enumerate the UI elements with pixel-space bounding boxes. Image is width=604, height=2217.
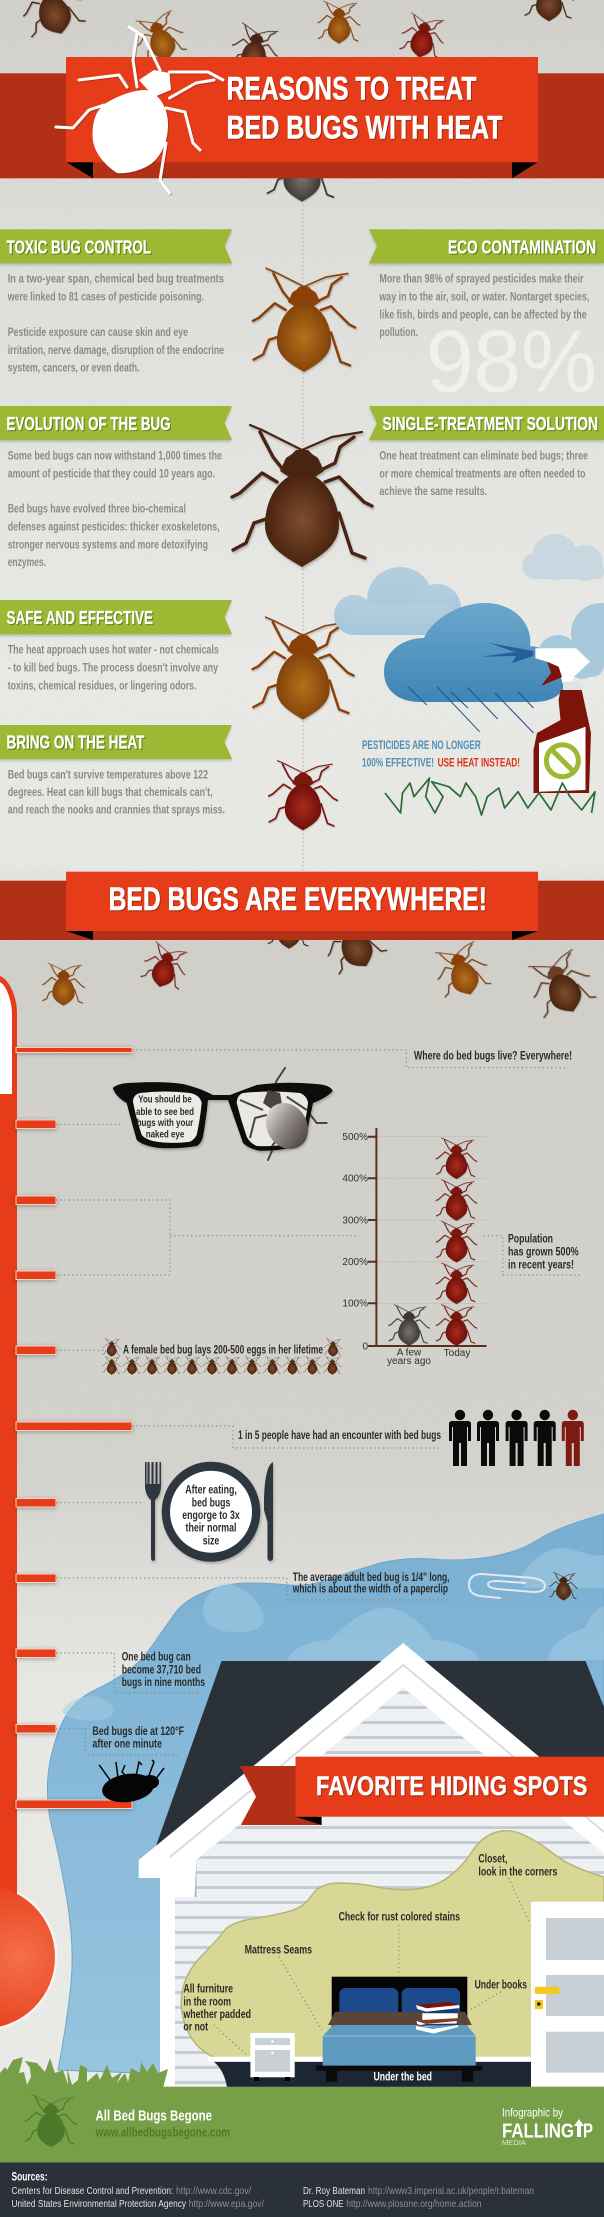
icon: green bug	[25, 2095, 77, 2147]
label: 1 in 5 people have had an encounter with bed bugs	[238, 1430, 441, 1442]
body text: In a two-year span, chemical bed bug treatments	[8, 274, 224, 286]
axis labels: 100%	[342, 1299, 368, 1310]
grid lines	[376, 1137, 486, 1303]
ribbon heading: BRING ON THE HEAT	[6, 731, 145, 752]
label: closet: look in the corners	[478, 1866, 557, 1878]
cloud: pale distant	[522, 534, 604, 581]
panel: single-treatment solution	[369, 406, 604, 498]
label: One bed bug can	[122, 1652, 191, 1664]
cloud: light blue right	[538, 603, 604, 679]
roof	[156, 1661, 604, 1860]
ribbon	[0, 725, 232, 759]
bug legs behind glasses	[268, 1068, 327, 1160]
dotted centre line	[302, 205, 304, 870]
section banner: bed bugs are everywhere	[0, 872, 604, 940]
category labels: Today	[444, 1348, 470, 1359]
body text: enzymes.	[8, 557, 46, 569]
axis labels: 300%	[342, 1215, 368, 1226]
source list: PLOS ONE	[303, 2198, 344, 2210]
leader line	[56, 1502, 144, 1504]
fact: engorge plate	[56, 1462, 273, 1562]
lens text: bugs with your	[137, 1117, 193, 1129]
body text: Some bed bugs can now withstand 1,000 times the	[8, 450, 222, 462]
label: books: Under books	[475, 1979, 527, 1991]
footer: green brand bar	[0, 2057, 604, 2162]
heading: reasons to treat: BED BUGS WITH HEAT	[226, 109, 503, 145]
leader line	[56, 1578, 454, 1600]
ribbon	[369, 406, 604, 440]
category labels: A few	[397, 1348, 422, 1359]
source list: United States Environmental Protection Agency	[12, 2198, 187, 2210]
plate text: After eating,	[185, 1482, 237, 1496]
ribbon	[0, 406, 232, 440]
callout: pesticides no longer effective: PESTICIDES ARE NO LONGER	[362, 740, 481, 752]
plate text: their normal	[186, 1521, 236, 1535]
rain lines	[408, 687, 534, 733]
egg bugs	[103, 1338, 342, 1375]
callout: in recent years!	[508, 1259, 574, 1271]
source list: http://www.epa.gov/	[189, 2198, 264, 2210]
label: furniture: All furniture	[183, 1984, 233, 1996]
tube	[0, 976, 17, 1900]
left lens	[133, 1092, 202, 1143]
source list	[12, 2185, 534, 2210]
lens text	[136, 1094, 194, 1140]
panel: bring on the heat	[0, 725, 232, 817]
label: Bed bugs die at 120°F	[92, 1726, 184, 1738]
body text	[8, 644, 219, 692]
source list: http://www3.imperial.ac.uk/people/r.bateman	[368, 2185, 534, 2197]
axis labels: 0	[362, 1341, 368, 1352]
lens text: You should be	[138, 1094, 192, 1106]
label: The average adult bed bug is 1/4" long,	[293, 1572, 450, 1584]
label: become 37,710 bed	[122, 1664, 201, 1676]
label: furniture: whether padded	[183, 2009, 251, 2021]
door	[531, 1902, 604, 2087]
white gable trim	[139, 1643, 604, 2087]
body text: achieve the same results.	[379, 486, 487, 498]
sky	[47, 1514, 604, 2090]
body text: were linked to 81 cases of pesticide poisoning.	[7, 292, 204, 304]
leader lines	[214, 1878, 530, 2055]
body text	[7, 274, 224, 375]
body text: pollution.	[379, 327, 418, 339]
room blob	[181, 1831, 604, 2058]
label: furniture: or not	[183, 2022, 208, 2034]
fact: 1 in 5 people	[132, 1410, 584, 1466]
credit: falling up media: Infographic by	[502, 2106, 563, 2120]
label: mattress: Mattress Seams	[245, 1944, 312, 1956]
callout: pesticides no longer effective: 100% EFFECTIVE!	[362, 758, 434, 770]
icon: fork	[145, 1462, 161, 1561]
spray jet	[482, 643, 534, 663]
axis labels: 500%	[342, 1132, 368, 1143]
callout: pesticides no longer effective: USE HEAT INSTEAD!	[438, 758, 520, 770]
lens text: naked eye	[146, 1128, 184, 1140]
lens text: able to see bed	[136, 1106, 194, 1118]
icon: magnified bug	[240, 1090, 316, 1157]
category labels	[387, 1348, 470, 1367]
grass outline	[385, 778, 595, 815]
fact: eggs	[56, 1338, 342, 1375]
heading: BED BUGS ARE EVERYWHERE!	[109, 881, 487, 917]
ribbon	[0, 229, 232, 263]
bugs: today column	[436, 1138, 477, 1346]
label	[292, 1572, 450, 1596]
tick marks	[16, 1048, 132, 1808]
source list: Centers for Disease Control and Prevention:	[12, 2185, 173, 2197]
axes	[368, 1128, 486, 1346]
callout	[508, 1234, 579, 1271]
icon: dead bug	[99, 1760, 164, 1805]
icon: orange bed bug	[253, 268, 355, 372]
callout: has grown 500%	[508, 1247, 579, 1259]
plate text: bed bugs	[192, 1496, 231, 1510]
body text	[379, 274, 589, 339]
body text: Bed bugs can't survive temperatures above 122	[8, 769, 208, 781]
leader line	[483, 1236, 582, 1275]
heading: reasons to treat	[226, 70, 503, 145]
spray bottle	[534, 648, 591, 793]
label: under the bed: Under the bed	[374, 2072, 432, 2084]
leader line	[132, 1426, 441, 1448]
label: which is about the width of a paperclip	[292, 1584, 448, 1596]
fact: glasses naked eye	[56, 1068, 333, 1160]
label: furniture: in the room	[183, 1996, 231, 2008]
body text: amount of pesticide that they could 10 years ago.	[8, 468, 215, 480]
fact: size of paperclip	[56, 1572, 578, 1600]
callout: Population	[508, 1234, 553, 1246]
icon: white bug silhouette	[56, 27, 223, 193]
icon: adult bug	[550, 1572, 578, 1600]
ground	[0, 2087, 604, 2162]
panel: eco contamination	[369, 229, 604, 411]
fact: where do bed bugs live	[132, 1050, 572, 1068]
source list: Dr. Roy Bateman	[303, 2185, 365, 2197]
label: closet: Closet,	[478, 1854, 507, 1866]
category labels: years ago	[387, 1356, 431, 1367]
floor	[214, 2062, 531, 2087]
big 98% watermark: 98%	[426, 312, 597, 411]
glasses frame	[113, 1082, 333, 1151]
label: A female bed bug lays 200-500 eggs in her lifetime	[123, 1344, 323, 1356]
icon: orange bed bug	[253, 617, 353, 719]
axis labels: 400%	[342, 1174, 368, 1185]
nightstand	[250, 2033, 295, 2081]
body text: and reach the nooks and crannies that sprays miss.	[8, 805, 225, 817]
body text	[8, 450, 222, 569]
label: bugs in nine months	[122, 1677, 205, 1689]
source list: http://www.plosone.org/home.action	[346, 2198, 482, 2210]
panel: evolution of the bug	[0, 406, 232, 569]
body text: Bed bugs have evolved three bio-chemical	[8, 504, 186, 516]
bed	[316, 1977, 482, 2082]
thermometer	[0, 976, 132, 2031]
leader line	[56, 1349, 104, 1351]
bug: few years ago column	[389, 1305, 429, 1346]
body text: Pesticide exposure can cause skin and eye	[8, 327, 188, 339]
sources heading: Sources:	[12, 2170, 48, 2184]
siding wall	[175, 1688, 604, 2087]
body text: system, cancers, or even death.	[8, 363, 140, 375]
body text: stronger nervous systems and more detoxifying	[8, 539, 208, 551]
credit: falling up media	[502, 2106, 593, 2147]
body text	[379, 450, 588, 498]
chart: population growth	[342, 1128, 582, 1367]
plate text: engorge to 3x	[182, 1508, 240, 1522]
books	[416, 2002, 459, 2034]
icon: paperclip	[469, 1574, 545, 1598]
title banner	[0, 57, 604, 178]
body text: degrees. Heat can kill bugs that chemicals can't,	[8, 787, 213, 799]
ribbon heading: TOXIC BUG CONTROL	[6, 236, 151, 257]
label	[92, 1726, 184, 1751]
house	[139, 1643, 604, 2087]
ribbon heading: EVOLUTION OF THE BUG	[6, 413, 170, 434]
icons: people	[449, 1410, 584, 1466]
panel: toxic bug control	[0, 229, 232, 375]
icon: knife	[264, 1462, 273, 1561]
label: furniture	[183, 1984, 251, 2034]
leader line	[56, 1653, 200, 1693]
label: closet	[478, 1854, 557, 1878]
brand name: All Bed Bugs Begone	[96, 2108, 212, 2125]
sky clouds	[62, 1548, 604, 1721]
leader line	[56, 1729, 180, 1755]
label: after one minute	[92, 1739, 162, 1751]
label: stains: Check for rust colored stains	[339, 1912, 460, 1924]
credit: falling up media: FALLING	[502, 2120, 574, 2142]
axis labels: 200%	[342, 1257, 368, 1268]
icon: red bed bug	[269, 761, 337, 830]
leader line	[56, 1123, 123, 1125]
illustration: clouds and pesticide spray	[334, 534, 604, 815]
section banner: favorite hiding spots	[240, 1757, 604, 1825]
hiding spot labels	[183, 1854, 557, 2084]
cloud: dark blue	[384, 603, 566, 702]
ribbon	[369, 229, 604, 263]
brand url: www.allbedbugsbegone.com	[95, 2125, 230, 2140]
scattered bugs above title	[13, 0, 573, 202]
callout: pesticides no longer effective	[362, 740, 520, 770]
panel: safe and effective	[0, 600, 232, 692]
right lens	[237, 1092, 308, 1146]
axis labels	[342, 1132, 368, 1352]
icon: plate	[162, 1462, 260, 1562]
body text: toxins, chemical residues, or lingering odors.	[8, 680, 197, 692]
heading: reasons to treat: REASONS TO TREAT	[226, 70, 477, 106]
source list: http://www.cdc.gov/	[176, 2185, 251, 2197]
grass tuft	[0, 2057, 168, 2088]
credit: falling up media: MEDIA	[502, 2138, 526, 2147]
body text: defenses against pesticides: thicker exoskeletons,	[8, 522, 220, 534]
plate text	[182, 1482, 240, 1547]
icon: large brown bed bug	[232, 425, 372, 567]
leader line: ticks to chart	[56, 1200, 356, 1275]
body text: - to kill bed bugs. The process doesn't involve any	[8, 662, 218, 674]
plate text: size	[203, 1533, 220, 1547]
footer: sources	[0, 2162, 604, 2217]
empty glass	[0, 982, 12, 1094]
credit: falling up media: P	[583, 2120, 593, 2142]
label	[122, 1652, 205, 1689]
icon: no symbol	[546, 745, 578, 777]
leader line	[132, 1050, 568, 1068]
fact: population multiplier	[56, 1652, 205, 1693]
ribbon heading: SAFE AND EFFECTIVE	[6, 607, 153, 628]
bulb	[0, 1883, 58, 2031]
scattered bugs around second banner	[42, 903, 600, 1024]
body text: The heat approach uses hot water - not chemicals	[8, 644, 219, 656]
body text: irritation, nerve damage, disruption of the endocrine	[8, 345, 224, 357]
ribbon	[0, 600, 232, 634]
body text	[8, 769, 225, 817]
cloud: light blue left	[334, 567, 461, 635]
bulb fill	[0, 1886, 55, 2028]
fact: heat kills	[56, 1726, 184, 1805]
